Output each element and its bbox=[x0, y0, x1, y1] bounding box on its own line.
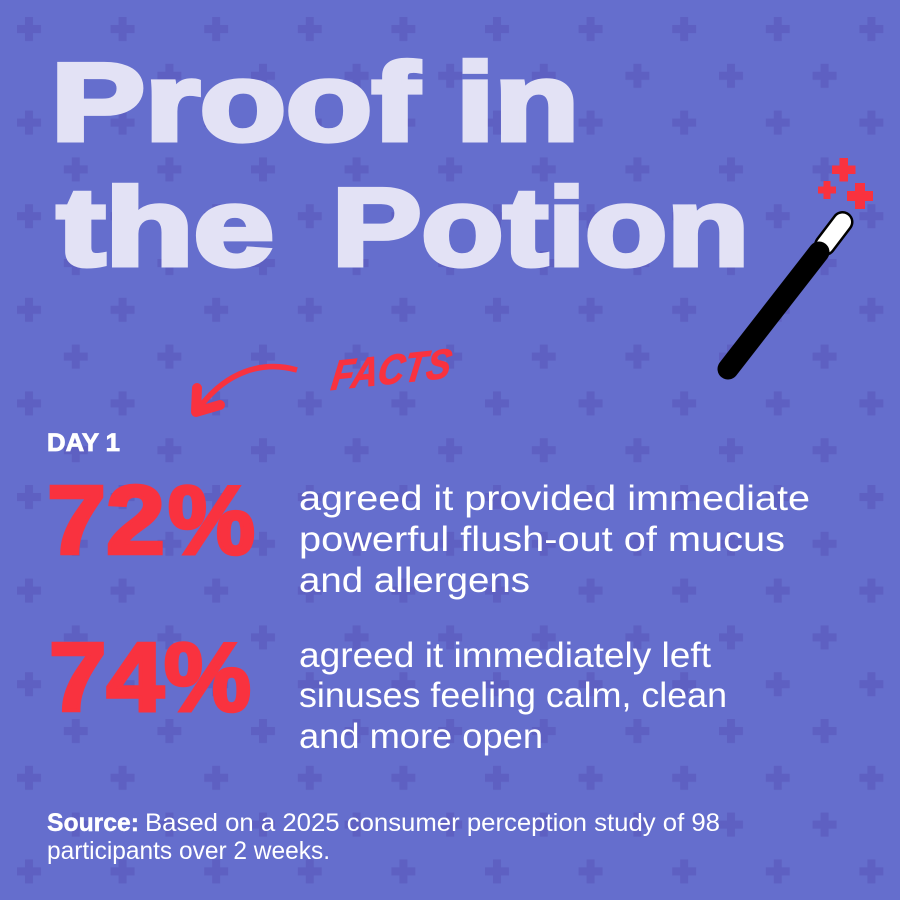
handwritten label: facts: FACTS bbox=[329, 339, 455, 399]
title: Potion bbox=[332, 166, 749, 289]
stat row: 74 percent: % bbox=[164, 622, 251, 732]
icon: magic wand with sparkles bbox=[728, 158, 873, 369]
stat row: 72 percent: and allergens bbox=[299, 561, 530, 600]
source note: Based on a 2025 consumer perception study of 98 bbox=[145, 809, 720, 837]
stat row: 74 percent: agreed it immediately left bbox=[299, 636, 711, 675]
stat row: 74 percent: sinuses feeling calm, clean bbox=[299, 676, 727, 715]
stat row: 72 percent bbox=[47, 466, 810, 600]
source note bbox=[47, 809, 720, 865]
stat row: 74 percent: and more open bbox=[299, 717, 543, 756]
arrow pointing to day 1 bbox=[196, 367, 297, 412]
title bbox=[51, 41, 749, 289]
source note: Source: bbox=[47, 809, 139, 837]
stat row: 74 percent bbox=[49, 622, 727, 756]
title: the bbox=[57, 166, 274, 289]
title: Proof bbox=[51, 41, 419, 164]
stat row: 72 percent: % bbox=[168, 466, 255, 574]
heading: day 1: DAY 1 bbox=[47, 429, 120, 457]
stat row: 72 percent: powerful flush-out of mucus bbox=[299, 520, 785, 559]
stat row: 74 percent: 74 bbox=[49, 622, 164, 732]
stat row: 72 percent: 72 bbox=[47, 466, 165, 574]
source note: participants over 2 weeks. bbox=[47, 837, 330, 865]
stat row: 72 percent: agreed it provided immediate bbox=[299, 479, 810, 518]
title: in bbox=[456, 41, 579, 164]
